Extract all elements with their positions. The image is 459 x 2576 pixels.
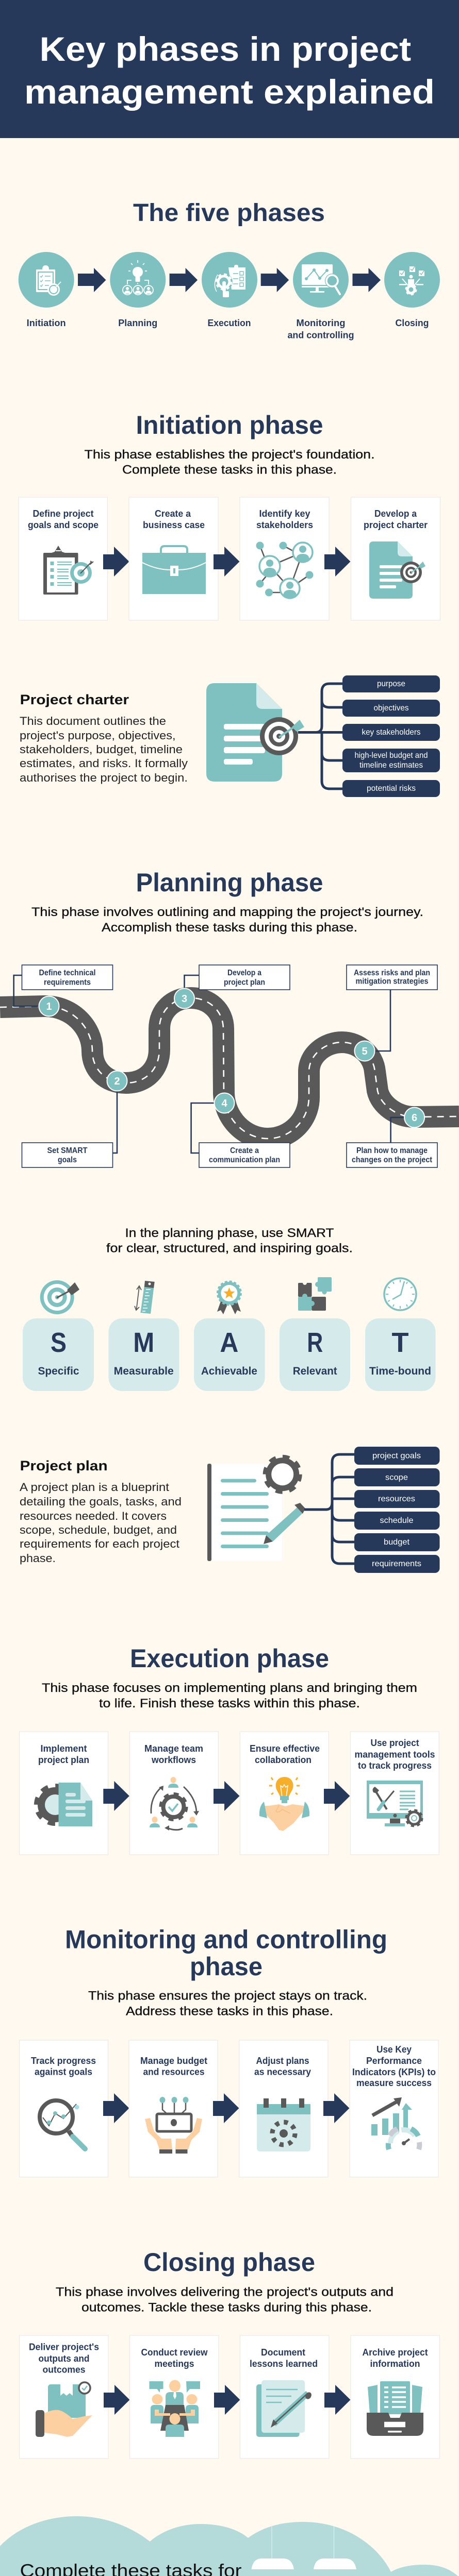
section: monitoring and controlling phase bbox=[20, 1925, 438, 2177]
intro text: to life. Finish these tasks within this phase. bbox=[99, 1697, 360, 1710]
arrow bbox=[261, 268, 289, 292]
task card: use project management tools: management tools bbox=[355, 1750, 435, 1760]
icon: KPI chart and gauge bbox=[371, 2097, 419, 2157]
heading: Closing phase bbox=[143, 2248, 315, 2277]
smart card: relevant: Relevant bbox=[293, 1365, 337, 1377]
step labels: communication plan bbox=[209, 1156, 280, 1164]
task card: archive project information bbox=[351, 2335, 439, 2459]
icon: ruler bbox=[135, 1281, 155, 1314]
section: closing phase bbox=[20, 2248, 439, 2459]
smart card: specific: S bbox=[51, 1327, 67, 1358]
task card: conduct review meetings: meetings bbox=[155, 2359, 194, 2369]
intro text: This phase ensures the project stays on track. bbox=[88, 1989, 367, 2003]
pill: purpose: purpose bbox=[377, 680, 405, 688]
task card: conduct review meetings bbox=[129, 2335, 219, 2459]
task card: identify key stakeholders: stakeholders bbox=[256, 520, 313, 530]
intro text: outcomes. Tackle these tasks during this phase. bbox=[81, 2301, 372, 2314]
pill: resources bbox=[354, 1490, 439, 1508]
intro text bbox=[85, 448, 374, 477]
intro text bbox=[31, 905, 423, 935]
icon: puzzle bbox=[298, 1277, 332, 1311]
heading: the five phases: The five phases bbox=[133, 199, 325, 227]
task card: archive project information: information bbox=[370, 2359, 420, 2369]
task card: track progress bbox=[20, 2040, 108, 2177]
task card: use project management tools bbox=[350, 1732, 439, 1855]
section: call to action scene bbox=[0, 2516, 459, 2576]
label: Planning bbox=[118, 318, 157, 328]
hanging lamps bbox=[252, 2526, 356, 2569]
pill: potential risks bbox=[342, 780, 440, 797]
text block: project plan description: scope, schedule, budget, and bbox=[20, 1523, 177, 1536]
heading: Monitoring and controlling bbox=[65, 1925, 387, 1954]
step numbers bbox=[46, 993, 417, 1124]
text block: project plan description bbox=[20, 1481, 182, 1565]
task card: manage budget and resources bbox=[129, 2040, 218, 2177]
text block: project charter description: This document outlines the bbox=[20, 715, 166, 727]
header banner bbox=[0, 0, 459, 138]
task card: manage budget and resources: Manage budget bbox=[140, 2056, 207, 2066]
task card: define project goals and scope: goals and scope bbox=[28, 520, 99, 530]
task card: deliver outputs and outcomes bbox=[20, 2335, 108, 2459]
intro text: This phase involves outlining and mapping the project's journey. bbox=[31, 905, 423, 919]
icon: notes and pencil bbox=[256, 2380, 313, 2437]
step labels: requirements bbox=[44, 978, 91, 987]
background hills bbox=[0, 2516, 459, 2576]
icon: calendar with gear bbox=[257, 2098, 310, 2151]
step labels: Set SMART bbox=[47, 1146, 88, 1155]
task card: use key performance indicators: Performance bbox=[366, 2056, 422, 2066]
icon: clock bbox=[384, 1278, 416, 1310]
task card: create a business case: business case bbox=[143, 520, 205, 530]
text block: project plan description: phase. bbox=[20, 1552, 56, 1565]
arrow bbox=[324, 1781, 350, 1811]
step numbers: 1 bbox=[46, 1001, 52, 1012]
pill: potential risks: potential risks bbox=[367, 784, 416, 793]
text block: project charter description: estimates, and risks. It formally bbox=[20, 757, 188, 770]
smart card: time-bound: Time-bound bbox=[369, 1365, 431, 1377]
task card: use project management tools: to track progress bbox=[358, 1760, 432, 1771]
main title: management explained bbox=[24, 73, 435, 111]
task card: implement project plan: project plan bbox=[38, 1755, 89, 1765]
pill: project goals: project goals bbox=[372, 1452, 421, 1461]
pill: budget and timeline: high-level budget and bbox=[355, 751, 428, 760]
text block: project plan description: requirements for each project bbox=[20, 1537, 179, 1550]
smart card: achievable: A bbox=[220, 1327, 238, 1358]
section: planning phase bbox=[0, 868, 459, 1167]
arrow bbox=[78, 268, 106, 292]
task card: track progress: Track progress bbox=[31, 2056, 96, 2066]
tree connector bbox=[304, 1454, 354, 1564]
task card: identify key stakeholders: Identify key bbox=[259, 509, 310, 519]
step labels: Develop a bbox=[227, 969, 261, 977]
step labels bbox=[39, 969, 433, 1164]
task card: archive project information: Archive project bbox=[362, 2347, 428, 2358]
step numbers: 3 bbox=[182, 993, 187, 1005]
section: initiation phase bbox=[19, 411, 440, 620]
arrow bbox=[103, 547, 129, 577]
label: and controlling bbox=[288, 330, 354, 340]
icon: plan document with gear and pencil bbox=[207, 1457, 305, 1561]
task card: ensure effective collaboration bbox=[240, 1732, 329, 1855]
task card: deliver outputs and outcomes: outputs and bbox=[38, 2353, 90, 2364]
smart card: measurable bbox=[108, 1281, 179, 1391]
intro text bbox=[56, 2285, 394, 2314]
intro text bbox=[42, 1681, 417, 1710]
task card: use key performance indicators bbox=[350, 2040, 438, 2177]
arrow bbox=[213, 2093, 239, 2123]
section: project charter bbox=[20, 675, 440, 797]
task card: ensure effective collaboration: Ensure effective bbox=[250, 1743, 320, 1754]
smart card: time-bound bbox=[365, 1278, 435, 1391]
pill: requirements bbox=[354, 1555, 439, 1573]
text block: project charter description: stakeholders, budget, timeline bbox=[20, 743, 183, 756]
pill: schedule bbox=[354, 1512, 439, 1530]
task card: define project goals and scope: Define project bbox=[33, 509, 94, 519]
smart card: relevant bbox=[280, 1277, 350, 1391]
phase: monitoring and controlling bbox=[288, 252, 354, 340]
task card: manage team workflows: workflows bbox=[151, 1755, 196, 1765]
icon: monitor with tools bbox=[367, 1781, 423, 1826]
arrow bbox=[214, 1781, 239, 1811]
smart card: achievable: Achievable bbox=[201, 1365, 257, 1377]
heading: Initiation phase bbox=[136, 411, 323, 439]
task card: deliver outputs and outcomes: Deliver project's bbox=[29, 2342, 99, 2352]
heading bbox=[65, 1925, 387, 1981]
arrow bbox=[324, 2385, 351, 2415]
main title bbox=[24, 30, 435, 111]
icon: document and target bbox=[369, 541, 425, 599]
arrow bbox=[353, 268, 381, 292]
icon: document archive tray bbox=[367, 2381, 423, 2436]
icon: award badge bbox=[217, 1282, 241, 1314]
icon: gear and document bbox=[36, 1783, 92, 1826]
pill: purpose bbox=[342, 675, 440, 692]
section: SMART goals bbox=[23, 1226, 435, 1391]
pill: scope: scope bbox=[385, 1473, 408, 1482]
heading: phase bbox=[190, 1952, 263, 1981]
text block: project charter description bbox=[20, 715, 188, 784]
label: Execution bbox=[207, 318, 251, 328]
text block: project plan description: resources needed. It covers bbox=[20, 1510, 167, 1522]
task card: conduct review meetings: Conduct review bbox=[141, 2347, 208, 2358]
heading: project plan: Project plan bbox=[20, 1458, 108, 1473]
task card: adjust plans: Adjust plans bbox=[256, 2056, 309, 2066]
intro text: This phase establishes the project's foundation. bbox=[85, 448, 374, 462]
pill: budget bbox=[354, 1533, 439, 1551]
task card: manage team workflows bbox=[129, 1732, 218, 1855]
step numbers: 4 bbox=[221, 1098, 227, 1109]
arrow bbox=[323, 2093, 350, 2123]
pill: budget and timeline: timeline estimates bbox=[359, 761, 423, 770]
task card: define project goals and scope bbox=[19, 497, 107, 620]
icon: money and hands bbox=[145, 2097, 202, 2154]
task card: develop a project charter: Develop a bbox=[374, 509, 417, 519]
intro text: for clear, structured, and inspiring goals. bbox=[106, 1242, 353, 1255]
label: Initiation bbox=[27, 318, 66, 328]
intro text bbox=[106, 1226, 353, 1255]
task card: create a business case: Create a bbox=[155, 509, 191, 519]
pill: project goals bbox=[354, 1447, 439, 1465]
task card: manage budget and resources: and resources bbox=[143, 2067, 204, 2077]
arrow bbox=[214, 2385, 240, 2415]
road map with six steps bbox=[0, 965, 459, 1167]
smart card: time-bound: T bbox=[392, 1327, 408, 1358]
intro text: Address these tasks in this phase. bbox=[126, 2004, 333, 2019]
label: Monitoring bbox=[296, 318, 346, 328]
tree connector bbox=[298, 684, 342, 789]
icon: target bbox=[40, 1280, 79, 1314]
intro text: Complete these tasks in this phase. bbox=[122, 463, 337, 477]
smart card: measurable: Measurable bbox=[114, 1365, 174, 1377]
pill: budget: budget bbox=[384, 1538, 410, 1547]
task card: use key performance indicators: Use Key bbox=[376, 2044, 412, 2055]
task card: adjust plans: as necessary bbox=[254, 2067, 311, 2077]
task card: develop a project charter: project charter bbox=[364, 520, 428, 530]
smart card: measurable: M bbox=[133, 1327, 154, 1358]
step labels: Create a bbox=[230, 1146, 259, 1155]
task card: adjust plans bbox=[239, 2040, 328, 2177]
task card: implement project plan: Implement bbox=[40, 1743, 87, 1754]
smart card: specific bbox=[23, 1280, 94, 1391]
phase: initiation bbox=[19, 252, 74, 328]
section: the five phases bbox=[19, 199, 440, 340]
icon: handshake and lightbulb bbox=[259, 1777, 309, 1831]
task card: use key performance indicators: Indicators (KPIs) to bbox=[352, 2067, 436, 2077]
step labels: Plan how to manage bbox=[356, 1146, 428, 1155]
pill: key stakeholders: key stakeholders bbox=[362, 728, 421, 737]
task card: develop a project charter bbox=[351, 497, 440, 620]
text block: project charter description: project's purpose, objectives, bbox=[20, 729, 175, 742]
task card: implement project plan bbox=[20, 1732, 108, 1855]
main title: Key phases in project bbox=[40, 30, 411, 68]
pill: requirements: requirements bbox=[372, 1560, 421, 1568]
icon: briefcase bbox=[142, 546, 206, 594]
task card: document lessons learned: Document bbox=[261, 2347, 305, 2358]
intro text: In the planning phase, use SMART bbox=[125, 1226, 334, 1240]
step labels: mitigation strategies bbox=[356, 977, 429, 986]
step labels: Assess risks and plan bbox=[354, 969, 430, 977]
icon: team workflow cycle bbox=[150, 1777, 199, 1831]
heading: Execution phase bbox=[130, 1644, 329, 1673]
pill: key stakeholders bbox=[342, 724, 440, 741]
arrow bbox=[214, 547, 239, 577]
pill: objectives: objectives bbox=[373, 704, 408, 713]
task card: deliver outputs and outcomes: outcomes bbox=[42, 2365, 86, 2375]
pill: scope bbox=[354, 1468, 439, 1486]
arrow bbox=[170, 268, 198, 292]
intro text: This phase focuses on implementing plans and bringing them bbox=[42, 1681, 417, 1695]
task card: document lessons learned bbox=[240, 2335, 329, 2459]
section: execution phase bbox=[20, 1644, 439, 1855]
text block: project charter description: authorises the project to begin. bbox=[20, 771, 188, 784]
arrow bbox=[104, 2385, 130, 2415]
phase: closing bbox=[384, 252, 440, 328]
icon: charter document with target bbox=[206, 683, 304, 782]
task card: document lessons learned: lessons learned bbox=[250, 2359, 318, 2369]
intro text bbox=[88, 1989, 367, 2019]
phase: planning bbox=[110, 252, 166, 328]
smart card: achievable bbox=[194, 1282, 265, 1391]
task card: manage team workflows: Manage team bbox=[144, 1743, 203, 1754]
smart card: relevant: R bbox=[307, 1327, 323, 1358]
icon: hand holding book bbox=[36, 2382, 92, 2437]
task card: create a business case bbox=[129, 497, 218, 620]
label: Closing bbox=[395, 318, 429, 328]
icon: magnifier with chart bbox=[40, 2100, 85, 2149]
task card: ensure effective collaboration: collaboration bbox=[255, 1755, 312, 1765]
step numbers: 5 bbox=[362, 1046, 368, 1057]
icon: stakeholder network bbox=[256, 542, 314, 598]
icon: team meeting bbox=[150, 2380, 200, 2437]
step labels: changes on the project bbox=[352, 1156, 433, 1164]
step numbers: 6 bbox=[412, 1112, 417, 1124]
step numbers: 2 bbox=[114, 1076, 120, 1087]
heading: Planning phase bbox=[136, 868, 323, 897]
pill: objectives bbox=[342, 700, 440, 717]
arrow bbox=[103, 1781, 129, 1811]
text block: project plan description: detailing the goals, tasks, and bbox=[20, 1495, 182, 1508]
section: project plan bbox=[20, 1447, 439, 1573]
step labels: goals bbox=[58, 1156, 77, 1164]
text block: project plan description: A project plan is a blueprint bbox=[20, 1481, 169, 1494]
arrow bbox=[324, 547, 351, 577]
arrow bbox=[103, 2093, 129, 2123]
task card: track progress: against goals bbox=[35, 2067, 92, 2077]
step labels: Define technical bbox=[39, 969, 96, 977]
task card: use project management tools: Use project bbox=[370, 1738, 419, 1748]
task card: use key performance indicators: measure success bbox=[356, 2078, 432, 2088]
smart card: specific: Specific bbox=[38, 1365, 79, 1377]
task card: identify key stakeholders bbox=[240, 497, 329, 620]
icon: clipboard and target bbox=[43, 546, 93, 595]
label bbox=[288, 318, 354, 340]
pill: schedule: schedule bbox=[380, 1516, 414, 1525]
intro text: This phase involves delivering the project's outputs and bbox=[56, 2285, 394, 2299]
step labels: project plan bbox=[224, 978, 265, 987]
pill: budget and timeline bbox=[342, 749, 440, 772]
phase: execution bbox=[202, 252, 257, 328]
pill: resources: resources bbox=[378, 1495, 415, 1503]
intro text: Accomplish these tasks during this phase. bbox=[102, 921, 357, 935]
heading: project charter: Project charter bbox=[20, 692, 129, 707]
